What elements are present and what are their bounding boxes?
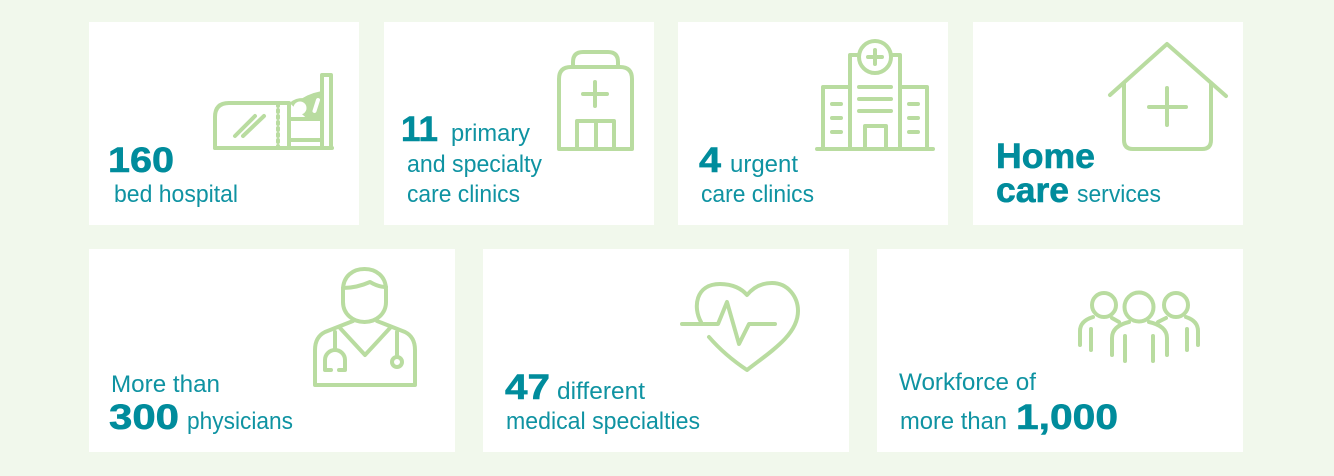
text: 4 urgent care clinics xyxy=(699,141,814,208)
text: more than 300 physicians: More than xyxy=(111,371,220,398)
text: home care services: services xyxy=(1077,181,1161,208)
panel: 4 urgent care clinics xyxy=(678,22,948,225)
text: home care services xyxy=(996,137,1161,210)
icon: heart with pulse xyxy=(682,283,798,370)
panel: more than 300 physicians xyxy=(89,249,455,452)
text: 11 primary and specialty care clinics xyxy=(401,110,542,208)
text: workforce of more than 1,000: more than xyxy=(900,408,1007,435)
icon: clinic building xyxy=(559,52,632,149)
text: home care services: Home xyxy=(996,137,1095,176)
text: 47 different medical specialties: medical specialties xyxy=(506,408,700,435)
text: 160 bed hospital: 160 xyxy=(108,141,174,180)
icon: hospital building xyxy=(817,41,933,149)
text: 4 urgent care clinics: care clinics xyxy=(701,181,814,208)
text: 160 bed hospital xyxy=(108,141,238,208)
text: more than 300 physicians: 300 xyxy=(109,398,179,437)
text: 11 primary and specialty care clinics: and specialty xyxy=(407,151,542,178)
text: more than 300 physicians xyxy=(109,371,293,437)
text: 4 urgent care clinics: urgent xyxy=(730,151,798,178)
panel: 11 primary and specialty care clinics xyxy=(384,22,654,225)
panel: 160 bed hospital xyxy=(89,22,359,225)
text: home care services: care xyxy=(996,171,1069,210)
text: 11 primary and specialty care clinics: care clinics xyxy=(407,181,520,208)
icon: house with plus xyxy=(1110,44,1226,149)
icon: hospital bed xyxy=(215,75,332,148)
icon: group of people xyxy=(1080,292,1198,361)
icon: doctor with stethoscope xyxy=(315,269,415,385)
panel: home care services xyxy=(973,22,1243,225)
text: workforce of more than 1,000 xyxy=(899,369,1118,437)
text: workforce of more than 1,000: Workforce of xyxy=(899,369,1036,396)
text: workforce of more than 1,000: 1,000 xyxy=(1016,398,1118,437)
text: 47 different medical specialties: 47 xyxy=(505,368,550,407)
text: 11 primary and specialty care clinics: 11 xyxy=(401,110,438,149)
text: 47 different medical specialties xyxy=(505,368,700,435)
text: more than 300 physicians: physicians xyxy=(187,408,293,435)
text: 47 different medical specialties: different xyxy=(557,378,645,405)
panel: workforce of more than 1,000 xyxy=(877,249,1243,452)
text: 11 primary and specialty care clinics: primary xyxy=(451,120,530,147)
panel: 47 different medical specialties xyxy=(483,249,849,452)
text: 160 bed hospital: bed hospital xyxy=(114,181,238,208)
text: 4 urgent care clinics: 4 xyxy=(699,141,722,180)
